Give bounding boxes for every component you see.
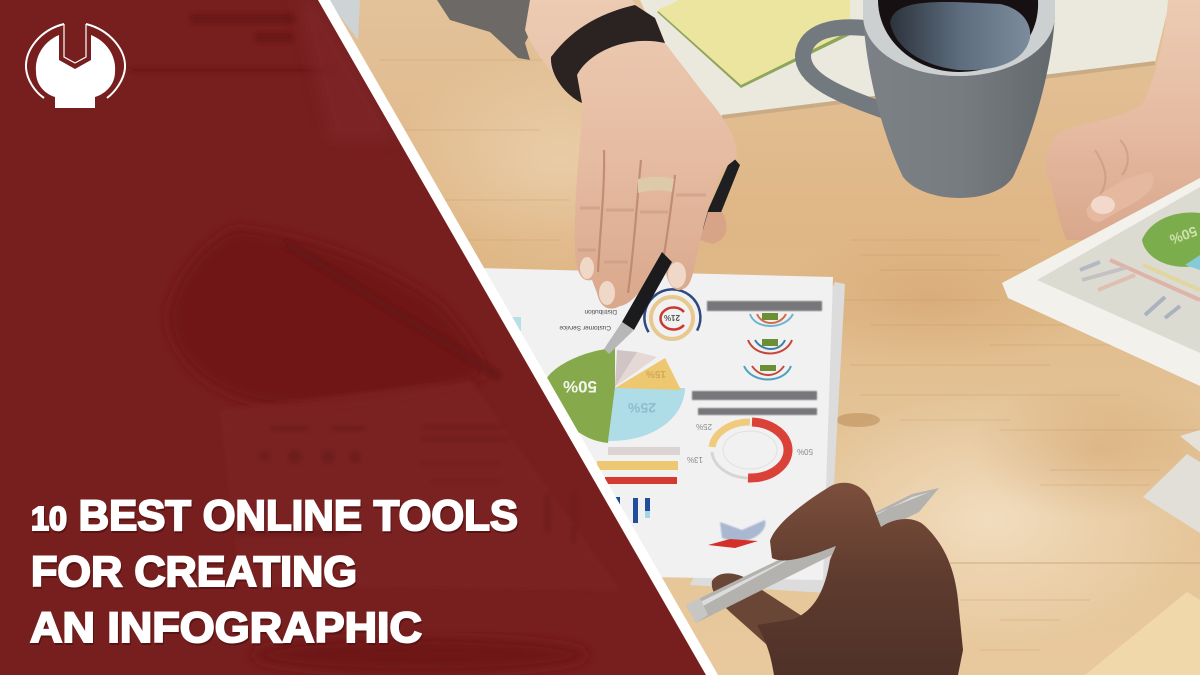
- circular gauge: 21%: [664, 313, 680, 322]
- pie chart: 15%: [646, 368, 666, 379]
- white notebook under sticky note: [640, 0, 1170, 117]
- ghost photo: lighter top right band: [316, 0, 398, 140]
- grey paper corner, top left: [328, 0, 360, 40]
- donut chart: 25%: [696, 422, 712, 431]
- upside-down paragraph text: [692, 301, 822, 415]
- title line 1: 10 BEST ONLINE TOOLS: [31, 492, 518, 540]
- circular gauge: [639, 282, 708, 348]
- horizontal bars: [597, 447, 680, 484]
- hand silhouette: [525, 0, 737, 309]
- lower left finger of dark hand: [712, 573, 805, 652]
- logo: wrench emblem: [26, 24, 125, 108]
- black pen lower section and silver tip: [604, 252, 672, 354]
- paper labels: [559, 308, 617, 331]
- ghost photo: sleeve and hand: [168, 228, 483, 406]
- rainbow gauges: [744, 313, 793, 380]
- fingernails: [580, 257, 686, 305]
- tablet: 50%: [1167, 223, 1199, 248]
- notebook wooden edge: [722, 63, 1155, 117]
- paper labels: Distribution: [584, 308, 617, 315]
- pie chart: 25%: [627, 400, 656, 416]
- silver pen: [686, 488, 939, 623]
- lower dark hand: [757, 483, 963, 675]
- upside-down map: [708, 520, 765, 548]
- upper left hand with bracelet: [525, 0, 737, 309]
- black pen upper section behind hand: [700, 156, 740, 235]
- sleeve of left arm: [437, 0, 547, 60]
- wedding ring: [638, 177, 674, 193]
- title line 3: AN INFOGRAPHIC: [30, 604, 422, 652]
- bottom right sticky note: [1085, 592, 1200, 675]
- pale blue strip at paper edge: [512, 317, 521, 331]
- donut chart: 13%: [687, 455, 703, 464]
- black leather bracelet: [551, 5, 665, 103]
- yellow sticky note: [657, 0, 850, 88]
- report paper with charts: [478, 268, 845, 593]
- ghost photo: pen: [285, 243, 500, 377]
- red overlay panel: [0, 0, 706, 675]
- ghost photo: lower hand shadow: [253, 640, 587, 670]
- finger creases: [598, 150, 675, 293]
- coffee mug: [803, 0, 1055, 198]
- title: [30, 492, 518, 652]
- title line 2: FOR CREATING: [31, 548, 357, 596]
- vertical blue bars: [615, 497, 650, 523]
- tablet: [1002, 178, 1200, 386]
- upper right hand: [1045, 0, 1200, 240]
- ghost photo: paper at bottom: [258, 384, 472, 458]
- donut chart: 50%: [797, 447, 813, 456]
- white diagonal stripe: [318, 0, 718, 675]
- pie chart: 50%: [563, 377, 597, 396]
- knuckle wrinkles: [578, 195, 706, 262]
- lower right loose papers: [1143, 454, 1200, 533]
- paper labels: Customer Service: [559, 324, 611, 331]
- pie chart: [547, 348, 685, 443]
- thumb behind pen: [700, 212, 727, 244]
- donut chart: [687, 422, 813, 478]
- ghost photo: paper at top: [130, 14, 294, 72]
